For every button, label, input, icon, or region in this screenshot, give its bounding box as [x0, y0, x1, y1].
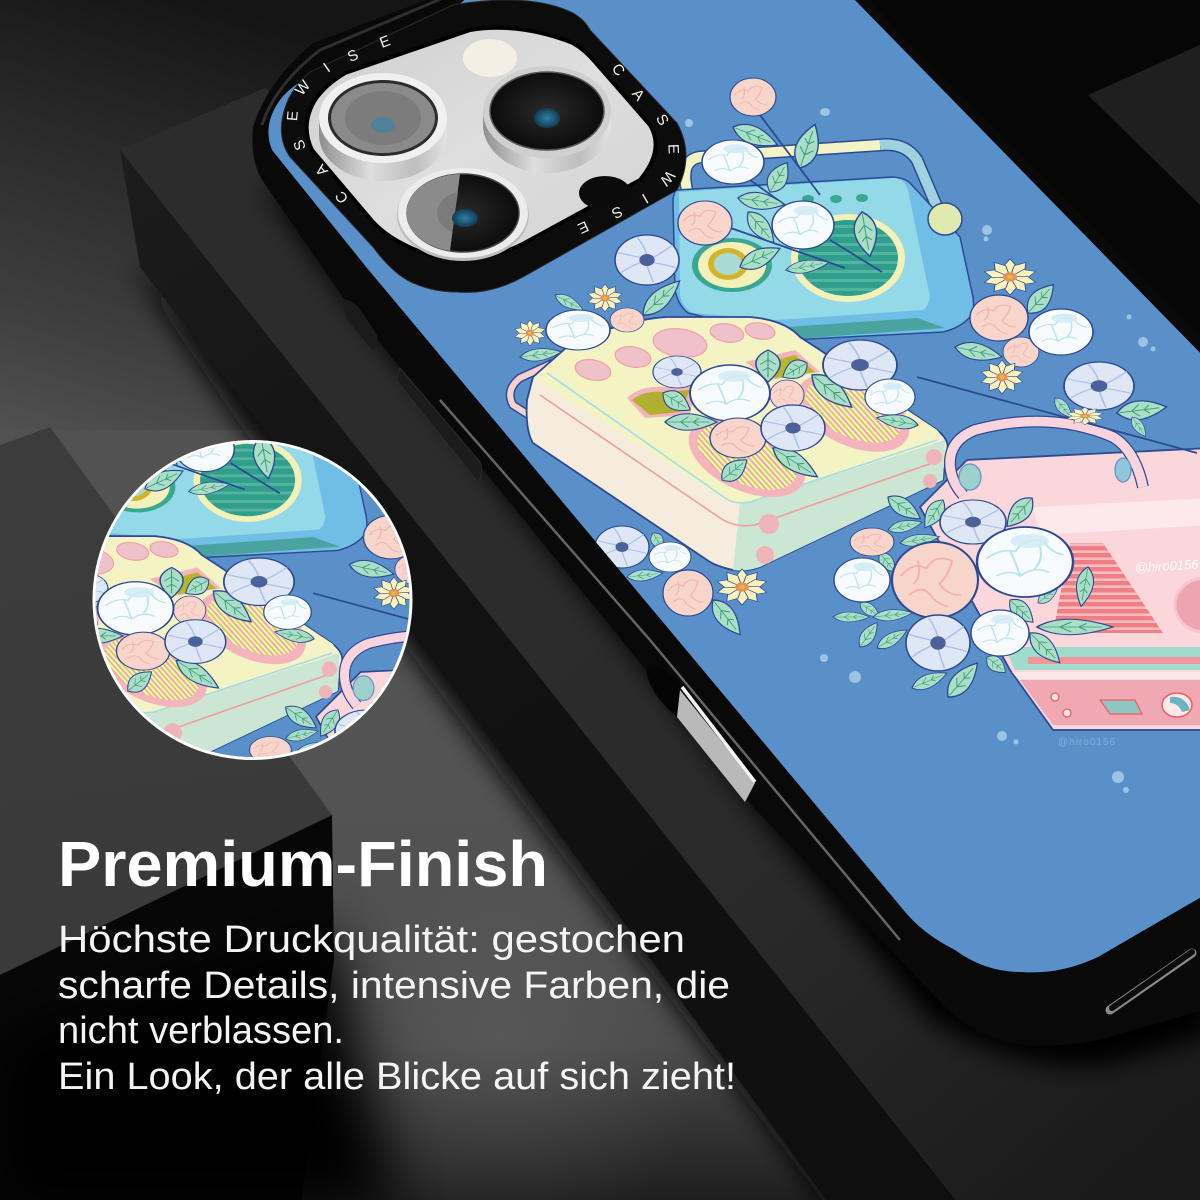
brand ring text: A — [312, 161, 332, 179]
camera module — [281, 0, 686, 292]
brand ring text: S — [652, 111, 672, 129]
brand ring text: E — [284, 110, 302, 122]
brand ring text: I — [320, 60, 334, 76]
brand ring text: W — [292, 76, 315, 99]
upper rim highlight — [262, 0, 450, 125]
brand ring text: E — [664, 144, 682, 154]
charging port opening — [1112, 952, 1192, 1008]
stems — [722, 115, 1197, 453]
screen artwork — [268, 0, 1200, 972]
rim highlight — [440, 400, 900, 940]
brand ring text: S — [609, 202, 625, 222]
flash — [463, 39, 517, 77]
camera ring — [281, 0, 686, 292]
brand ring text: S — [290, 137, 310, 153]
volume buttons — [396, 368, 482, 482]
brand ring text: W — [655, 167, 678, 190]
artist signature: @hiro0156 — [1134, 557, 1200, 575]
lens 2 — [483, 66, 611, 173]
camera glass — [307, 28, 656, 258]
side key metal — [677, 690, 755, 802]
brand ring text: A — [628, 86, 648, 104]
body text: scharfe Details, intensive Farben, die — [58, 965, 730, 1007]
sensor — [579, 176, 631, 210]
side key recess — [646, 667, 755, 802]
top right corner — [800, 0, 1200, 500]
lens 3 — [397, 168, 529, 261]
speckles — [685, 108, 1156, 793]
phone shadow — [263, 187, 1200, 1067]
brand ring text: E — [377, 32, 393, 52]
brand ring text: C — [608, 60, 628, 80]
brand ring text: E — [575, 217, 591, 237]
top right block — [1088, 45, 1200, 205]
lower left block front — [0, 815, 334, 1200]
body text: nicht verblassen. — [58, 1010, 344, 1052]
teal radio — [673, 145, 974, 340]
leaves — [519, 119, 1168, 703]
action button — [343, 300, 377, 350]
side key highlight — [682, 687, 755, 782]
body text — [58, 919, 736, 1098]
brand ring text: S — [345, 46, 361, 66]
phone case body — [252, 0, 1200, 1046]
wedge shadow — [0, 930, 395, 1200]
artist watermark: @hiro0156 — [1058, 737, 1116, 748]
heading: Premium-Finish — [58, 828, 548, 900]
charging port — [1110, 953, 1192, 1010]
lower left block top — [0, 427, 332, 975]
plinth side face — [120, 150, 960, 1200]
yellow radio — [510, 317, 948, 571]
lens 1 — [319, 73, 447, 181]
phone — [252, 0, 1200, 1073]
floor glow — [280, 800, 780, 1200]
brand ring text — [284, 32, 682, 237]
detail magnifier circle — [92, 440, 412, 760]
body text: Ein Look, der alle Blicke auf sich zieht! — [58, 1056, 736, 1098]
body text: Höchste Druckqualität: gestochen — [58, 919, 685, 961]
brand ring text: I — [639, 190, 651, 206]
floor — [0, 430, 900, 1200]
plinth shadow — [130, 262, 930, 1200]
flowers — [514, 78, 1134, 671]
pink radio — [920, 421, 1200, 748]
brand ring text: C — [332, 187, 352, 206]
